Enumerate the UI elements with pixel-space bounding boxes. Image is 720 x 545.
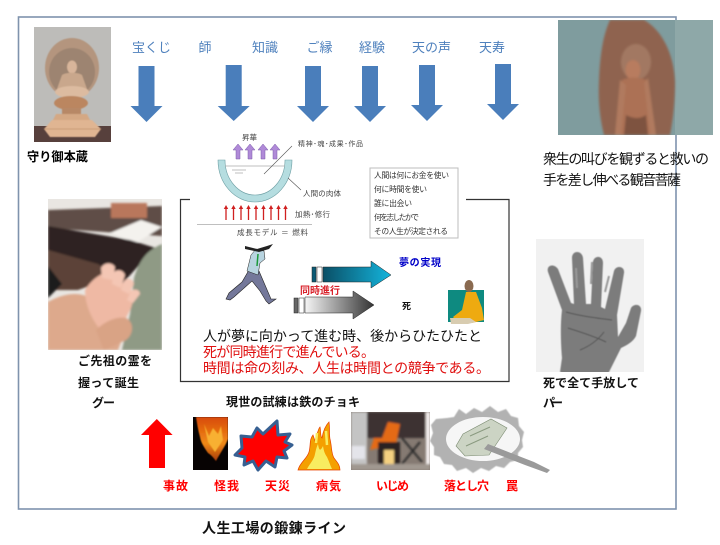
label: knowledge: 知識 [252, 40, 278, 55]
label: spirit, soul, results, works: 精神･魂･成果･作品 [298, 139, 363, 148]
arrow: dream path [312, 261, 391, 288]
box line 2: 何に時間を使い [374, 184, 427, 194]
inner bracket frame [180, 200, 509, 382]
message line 1: 人が夢に向かって進む時、後からひたひたと [203, 328, 482, 344]
label: realizing dreams: 夢の実現 [399, 256, 441, 269]
heading: iron scissors of worldly trials: 現世の試練は鉄のチョキ [226, 394, 360, 409]
label: injury: 怪我 [214, 479, 239, 493]
arrow 6 [487, 64, 519, 120]
caption: Kannon bodhisattva [543, 151, 709, 188]
icon: red up arrow [141, 419, 173, 468]
arrow 1 [130, 66, 162, 122]
icon: flame [298, 422, 340, 470]
caption: baby's fist [78, 353, 152, 410]
label: illness: 病気 [316, 478, 341, 493]
main message [203, 328, 490, 376]
caption line 3: グー [92, 395, 115, 410]
label: accident: 事故 [163, 478, 188, 493]
photo: Kannon bodhisattva relief [558, 20, 713, 135]
water surface [225, 166, 285, 173]
label: trap: 罠 [506, 479, 518, 493]
arrow 2 [218, 65, 250, 121]
icon: meditating monk [448, 280, 484, 324]
label: experience: 経験 [359, 40, 385, 55]
text box: what decides a life [370, 168, 458, 238]
label: growth model equals fuel: 成長モデル ＝ 燃料 [237, 227, 308, 237]
growth model diagram [197, 132, 363, 237]
photo: guardian Buddha statue [34, 27, 111, 142]
box line 3: 誰に出会い [374, 198, 412, 208]
hazard labels [163, 478, 518, 493]
title: 人生工場の鍛錬ライン [202, 520, 346, 536]
label: lifespan: 天寿 [479, 40, 505, 55]
arrow 4 [354, 66, 386, 122]
caption line 2: 手を差し伸べる観音菩薩 [543, 172, 681, 188]
arrow 5 [411, 65, 443, 121]
message line 3: 時間は命の刻み、人生は時間との競争である。 [203, 360, 490, 376]
caption line 1: ご先祖の霊を [78, 353, 152, 368]
label: simultaneous progress: 同時進行 [300, 284, 340, 297]
label: sublimation: 昇華 [242, 132, 257, 142]
photo: burning building [351, 412, 430, 470]
caption: guardian statue: 守り御本蔵 [27, 149, 88, 164]
baseline [197, 224, 312, 226]
purple upward arrows [233, 144, 280, 159]
row of blessings: labels and arrows [130, 40, 519, 122]
label: heating and training: 加熱･修行 [295, 209, 330, 219]
arrow: death path [294, 291, 374, 319]
label: human body: 人間の肉体 [303, 188, 342, 198]
caption line 2: パー [543, 396, 563, 410]
label: natural disaster: 天災 [265, 479, 290, 493]
label: voice of heaven: 天の声 [412, 40, 451, 55]
label: lottery: 宝くじ [132, 40, 171, 55]
icon: running man [226, 244, 276, 304]
label: teacher: 師 [198, 40, 212, 55]
label: connections: ご縁 [306, 40, 333, 55]
box line 1: 人間は何にお金を使い [374, 170, 449, 180]
caption line 2: 握って誕生 [78, 375, 139, 390]
photo: baby's fist [48, 199, 162, 350]
photo: fire [193, 417, 228, 470]
message line 2: 死が同時進行で進んでいる。 [203, 344, 375, 360]
box line 5: その人生が決定される [374, 226, 448, 236]
photo: open hand [536, 239, 644, 372]
leader lines [264, 146, 301, 190]
label: death: 死 [402, 301, 411, 311]
label: bullying: いじめ [376, 479, 409, 493]
red heating arrows [224, 205, 288, 220]
bowl: human body [218, 160, 292, 202]
caption: open hand [543, 375, 639, 410]
arrow 3 [297, 66, 329, 122]
label: pitfall: 落とし穴 [444, 478, 489, 493]
icon: bear trap with dollar bills [430, 406, 550, 473]
box line 4: 何を志したかで [374, 212, 419, 222]
caption line 1: 衆生の叫びを観ずると救いの [543, 151, 709, 167]
caption line 1: 死で全て手放して [543, 375, 639, 390]
icon: explosion [235, 421, 292, 470]
